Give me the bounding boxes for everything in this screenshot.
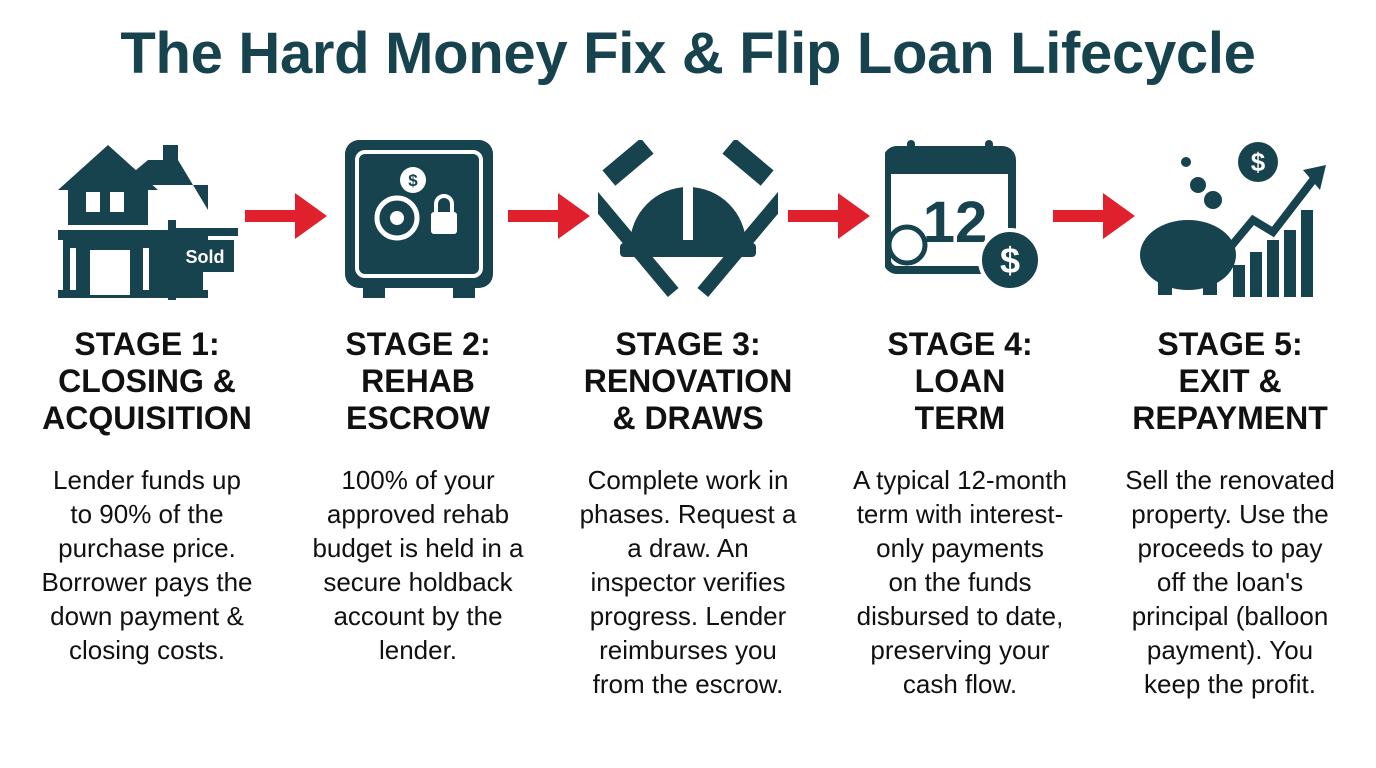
arrow 2 — [508, 193, 590, 239]
stage 1 text: to 90% of the — [70, 499, 224, 529]
stage 3 text: from the escrow. — [593, 669, 783, 699]
stage 2 heading: ESCROW — [346, 400, 490, 436]
stage 4 text: term with interest- — [857, 499, 1063, 529]
stage 2 heading: STAGE 2: — [345, 326, 491, 362]
stage 4 text: preserving your — [870, 635, 1050, 665]
stage 3 heading: RENOVATION — [584, 363, 792, 399]
stage 3 text: Complete work in — [588, 465, 788, 495]
stage 5 heading: REPAYMENT — [1132, 400, 1328, 436]
stage 2 text: lender. — [379, 635, 457, 665]
stage 3 text: phases. Request a — [580, 499, 796, 529]
icon: piggy bank growth — [1140, 142, 1326, 297]
stage 2 text — [312, 465, 524, 665]
stage 2 heading: REHAB — [361, 363, 475, 399]
icon: hard hat and hammers — [598, 140, 778, 297]
icon: safe: $ — [408, 171, 418, 190]
stage 4 text — [853, 465, 1067, 699]
stage 1 text: Lender funds up — [53, 465, 241, 495]
icon: house sold — [58, 145, 238, 300]
icon: calendar 12: 12 — [923, 190, 987, 255]
stage 1 text: down payment & — [50, 601, 244, 631]
stage 5 text: off the loan's — [1157, 567, 1303, 597]
icon: calendar 12 — [885, 140, 1038, 288]
stage 5 heading: STAGE 5: — [1157, 326, 1303, 362]
stage 5 text — [1125, 465, 1335, 699]
stage 3 text: inspector verifies — [590, 567, 786, 597]
stage 1 text: closing costs. — [69, 635, 225, 665]
stage 1 text: purchase price. — [58, 533, 236, 563]
stage 5 heading: EXIT & — [1178, 363, 1282, 399]
stage 4 heading: LOAN — [915, 363, 1005, 399]
arrow 4 — [1053, 193, 1135, 239]
stage 3 heading — [584, 326, 792, 436]
stage 4 text: cash flow. — [903, 669, 1017, 699]
stage 2 heading — [345, 326, 491, 436]
stage 5 text: property. Use the — [1131, 499, 1329, 529]
stage 5 text: Sell the renovated — [1125, 465, 1335, 495]
stage 3 heading: STAGE 3: — [615, 326, 761, 362]
stage 1 text: Borrower pays the — [42, 567, 252, 597]
icon: piggy bank growth: $ — [1251, 147, 1266, 177]
stage 5 text: principal (balloon — [1132, 601, 1328, 631]
stage 5 text: proceeds to pay — [1137, 533, 1322, 563]
icon: house sold: Sold — [186, 247, 224, 267]
arrow 1 — [245, 193, 327, 239]
stage 4 heading: STAGE 4: — [887, 326, 1033, 362]
stage 1 text — [42, 465, 252, 665]
arrow 3 — [788, 193, 870, 239]
stage 1 heading: CLOSING & — [58, 363, 236, 399]
stage 3 text: a draw. An — [627, 533, 749, 563]
stage 1 heading — [42, 326, 252, 436]
stage 4 text: A typical 12-month — [853, 465, 1067, 495]
stage 5 heading — [1132, 326, 1328, 436]
icon: safe — [345, 140, 493, 298]
stage 2 text: secure holdback — [323, 567, 513, 597]
stage 4 heading: TERM — [915, 400, 1005, 436]
stage 1 heading: STAGE 1: — [74, 326, 220, 362]
stage 3 text: reimburses you — [599, 635, 777, 665]
stage 4 text: on the funds — [888, 567, 1032, 597]
stage 2 text: budget is held in a — [312, 533, 524, 563]
stage 4 heading — [887, 326, 1033, 436]
icon: calendar 12: $ — [1000, 240, 1020, 281]
title: The Hard Money Fix & Flip Loan Lifecycle — [120, 21, 1256, 86]
stage 1 heading: ACQUISITION — [42, 400, 252, 436]
stage 4 text: only payments — [876, 533, 1044, 563]
stage 5 text: payment). You — [1147, 635, 1313, 665]
stage 3 text — [580, 465, 796, 699]
stage 2 text: account by the — [333, 601, 503, 631]
stage 2 text: 100% of your — [341, 465, 495, 495]
stage 3 heading: & DRAWS — [612, 400, 764, 436]
stage 2 text: approved rehab — [327, 499, 509, 529]
stage 5 text: keep the profit. — [1144, 669, 1316, 699]
stage 3 text: progress. Lender — [590, 601, 786, 631]
stage 4 text: disbursed to date, — [857, 601, 1063, 631]
